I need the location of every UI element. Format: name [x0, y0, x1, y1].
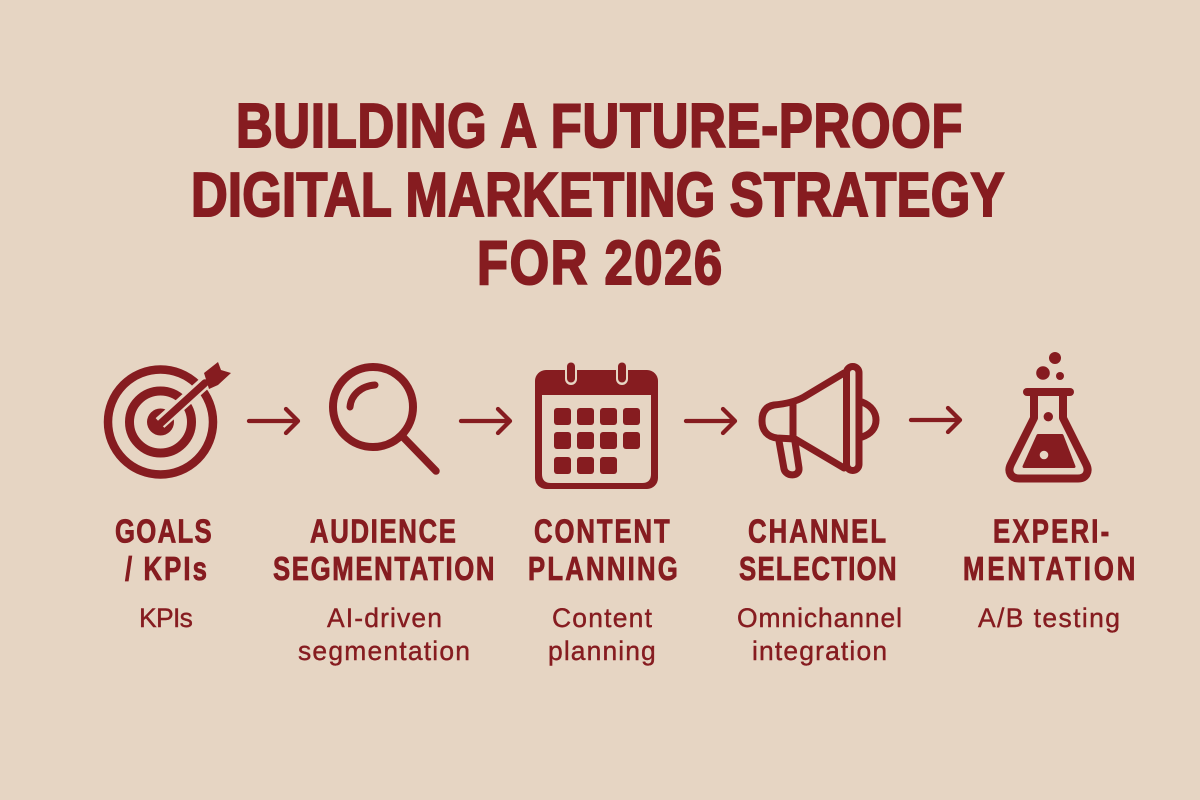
step: goals / KPIs	[108, 362, 231, 633]
description: segmentation: segmentation	[298, 636, 470, 666]
icon: magnifying glass	[333, 367, 436, 471]
heading: audience: AUDIENCE	[310, 514, 456, 550]
description: planning: planning	[548, 636, 656, 666]
heading: mentation: MENTATION	[963, 551, 1135, 588]
heading: goals: GOALS	[115, 514, 212, 550]
arrow 1	[249, 409, 298, 433]
heading: experi-: EXPERI-	[993, 514, 1109, 550]
icon: calendar	[535, 361, 658, 489]
heading: channel: CHANNEL	[748, 514, 886, 550]
heading: segmentation: SEGMENTATION	[273, 551, 495, 588]
description: content: Content	[552, 603, 653, 633]
title: BUILDING A FUTURE-PROOF	[236, 92, 963, 161]
heading: KPIs: / KPIs	[125, 551, 207, 588]
icon: flask with bubbles	[1009, 352, 1088, 478]
arrow 4	[911, 408, 960, 432]
arrow 3	[686, 409, 735, 433]
title: DIGITAL MARKETING STRATEGY	[191, 161, 1004, 230]
description: omnichannel: Omnichannel	[737, 603, 902, 633]
arrow 2	[461, 409, 510, 433]
step: experimentation	[963, 352, 1135, 633]
step: channel selection	[737, 366, 902, 666]
icon: target with arrow	[108, 362, 231, 474]
heading: content: CONTENT	[534, 514, 670, 550]
title: FOR 2026	[477, 229, 722, 298]
step: content planning	[528, 361, 678, 666]
description: KPIs: KPIs	[139, 603, 193, 633]
description: AI-driven: AI-driven	[327, 603, 442, 633]
description: integration: integration	[752, 636, 887, 666]
title	[191, 92, 1004, 298]
heading: selection: SELECTION	[739, 551, 897, 588]
step: audience segmentation	[273, 367, 495, 666]
description: A/B testing: A/B testing	[978, 603, 1120, 633]
icon: megaphone	[762, 366, 876, 475]
heading: planning: PLANNING	[528, 551, 678, 588]
